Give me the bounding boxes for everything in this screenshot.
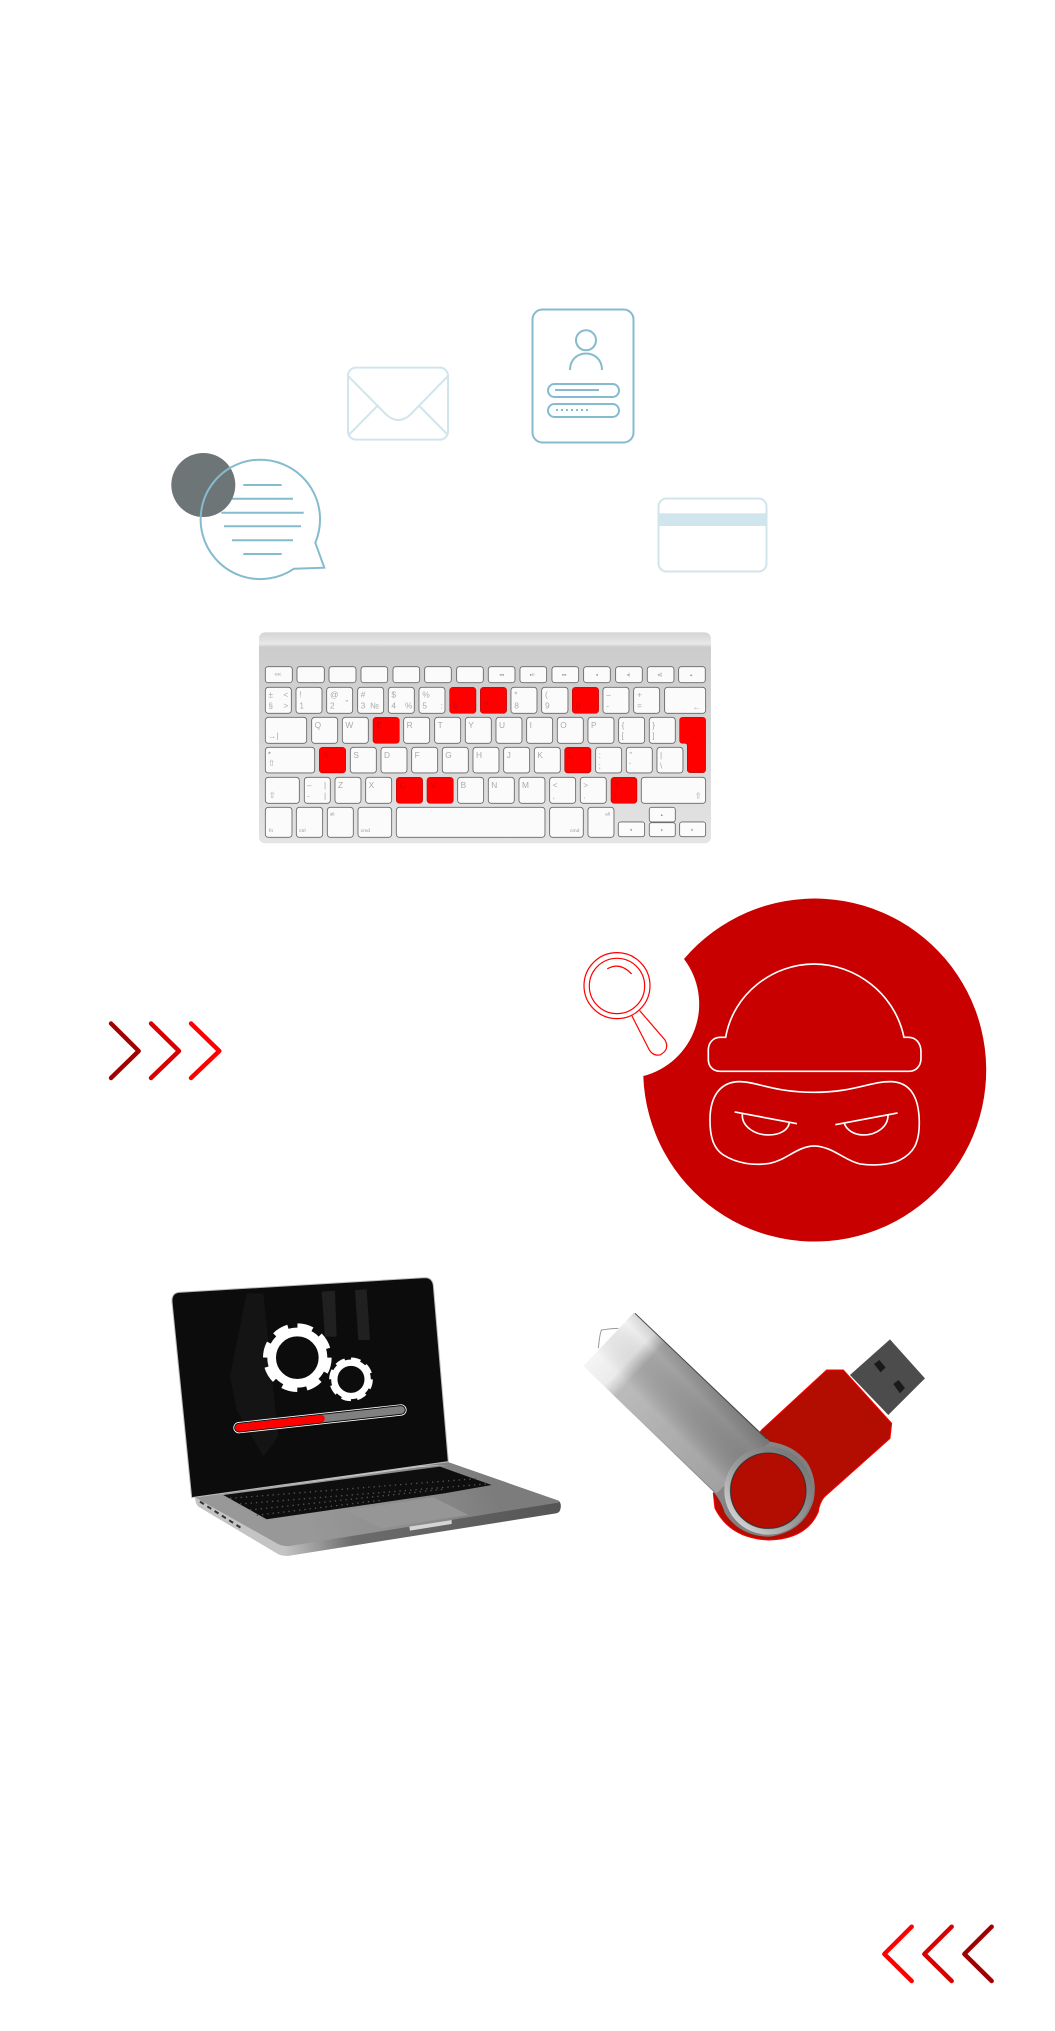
number key row: 4 — [391, 701, 396, 711]
QWERTY key row: →| — [268, 730, 278, 740]
number key row: : — [441, 701, 443, 711]
QWERTY key row: I — [530, 720, 532, 730]
modifier key row: ◂ — [630, 827, 632, 832]
bottom letter key row: < — [553, 780, 558, 790]
home key row: L — [568, 750, 573, 760]
number key row: @ — [330, 689, 338, 699]
home key row: H — [476, 750, 482, 760]
QWERTY key row: U — [499, 720, 505, 730]
number key row: § — [268, 701, 273, 711]
home key row: K — [537, 750, 543, 760]
bottom letter key row: > — [583, 780, 588, 790]
icon: gears — [266, 1327, 371, 1399]
QWERTY key row: E — [376, 720, 382, 730]
QWERTY key row: P — [591, 720, 597, 730]
number key row: 3 — [361, 701, 366, 711]
function key row — [265, 667, 705, 683]
bottom letter key row: , — [553, 791, 555, 801]
bottom letter key row: X — [369, 780, 375, 790]
bottom letter key row: ? — [614, 780, 619, 790]
QWERTY key row: ← — [691, 729, 700, 739]
QWERTY key row: Q — [315, 720, 322, 730]
bottom letter key row: Z — [338, 780, 343, 790]
bottom letter key row: C — [400, 780, 406, 790]
function key row: ◂) — [627, 672, 631, 677]
function key row: ◂)) — [657, 672, 663, 677]
bottom letter key row: ⇧ — [269, 790, 276, 800]
icon: magnifying glass — [584, 953, 667, 1055]
icon: chat bubble with grey dot — [171, 453, 324, 579]
icon: thief hat and mask — [708, 964, 921, 1165]
icon: credit card — [658, 498, 767, 572]
bottom letter key row: . — [583, 791, 586, 801]
number key row: > — [283, 701, 288, 711]
number key row: # — [361, 689, 366, 699]
number key row: ± — [268, 689, 273, 699]
home key row: G — [445, 750, 452, 760]
number key row: ( — [545, 689, 548, 699]
function key row: ◂ — [596, 672, 598, 677]
home key row: J — [507, 750, 511, 760]
bottom letter key row — [265, 777, 706, 803]
function key row: esc — [275, 671, 282, 676]
function key row: ▸II — [530, 672, 535, 677]
function key row: ◂◂ — [499, 672, 504, 677]
progress bar — [239, 1410, 401, 1428]
number key row: % — [405, 701, 413, 711]
QWERTY key row: { — [622, 720, 625, 730]
function key row: ▴ — [690, 672, 692, 677]
home key row: ; — [599, 761, 601, 771]
number key row: * — [514, 689, 518, 699]
number key row: $ — [391, 689, 396, 699]
bottom letter key row: N — [491, 780, 497, 790]
home key row: A — [323, 750, 329, 760]
bottom letter key row: | — [324, 791, 326, 801]
number key row: 7 — [484, 701, 489, 711]
home key row — [265, 747, 683, 773]
modifier key row — [265, 807, 706, 837]
modifier key row: ▴ — [661, 812, 663, 817]
red body — [713, 1370, 892, 1540]
number key row: % — [422, 689, 430, 699]
number key row: ! — [299, 689, 302, 699]
function key row: ▸▸ — [562, 672, 567, 677]
bottom letter key row: B — [461, 780, 467, 790]
USB flash drive — [583, 1313, 925, 1540]
number key row — [265, 687, 706, 713]
modifier key row: cmd — [570, 828, 580, 834]
modifier key row: ctrl — [299, 828, 306, 834]
bottom letter key row: - — [307, 791, 310, 801]
bottom letter key row: V — [430, 780, 436, 790]
home key row: | — [660, 750, 662, 760]
bottom letter key row: / — [614, 791, 617, 801]
bottom letter key row: ⇧ — [695, 791, 702, 801]
QWERTY key row: } — [652, 720, 655, 730]
home key row: D — [384, 750, 390, 760]
number key row: № — [370, 701, 379, 711]
modifier key row: fn — [269, 828, 273, 834]
icon: login card — [532, 310, 634, 442]
laptop screen — [172, 1278, 448, 1498]
modifier key row: ▸ — [691, 827, 693, 832]
home key row: ' — [629, 761, 631, 771]
metal swivel — [583, 1313, 815, 1537]
home key row: ⇧ — [268, 758, 275, 768]
number key row: 8 — [514, 701, 519, 711]
number key row: ← — [693, 701, 701, 711]
number key row: 2 — [330, 701, 335, 711]
laptop with settings screen — [172, 1278, 561, 1556]
bottom letter key row: M — [522, 780, 529, 790]
QWERTY key row: R — [407, 720, 413, 730]
number key row: – — [606, 689, 611, 699]
number key row: + — [637, 689, 642, 699]
number key row: 9 — [545, 701, 550, 711]
icon: envelope — [348, 368, 448, 440]
modifier key row: cmd — [361, 828, 370, 834]
number key row: " — [345, 698, 348, 708]
number key row: < — [283, 689, 288, 699]
QWERTY key row: [ — [622, 731, 625, 741]
number key row: = — [637, 701, 642, 711]
QWERTY key row — [265, 717, 706, 773]
laptop base — [195, 1462, 561, 1556]
modifier key row: alt — [330, 811, 335, 816]
modifier key row: ▾ — [661, 827, 663, 832]
home key row: F — [415, 750, 420, 760]
QWERTY key row: ] — [652, 731, 655, 741]
QWERTY key row: T — [438, 720, 443, 730]
bottom letter key row: – — [307, 780, 312, 790]
QWERTY key row: W — [345, 720, 353, 730]
home key row: • — [268, 747, 271, 757]
number key row: - — [606, 701, 609, 711]
number key row: 1 — [299, 701, 304, 711]
chevrons pointing right — [111, 1024, 219, 1078]
number key row: 6 — [453, 701, 458, 711]
QWERTY key row: Y — [468, 720, 474, 730]
home key row: \ — [660, 761, 663, 771]
home key row: S — [353, 750, 359, 760]
number key row: 5 — [422, 701, 427, 711]
USB plug — [850, 1339, 925, 1415]
number key row: 0 — [576, 701, 581, 711]
home key row: : — [599, 750, 601, 760]
red circle with thief icon — [643, 899, 986, 1242]
home key row: " — [629, 750, 632, 760]
bottom letter key row: | — [324, 780, 326, 790]
modifier key row: alt — [605, 811, 611, 816]
QWERTY key row: O — [560, 720, 567, 730]
keyboard with red keys — [259, 632, 711, 843]
chevrons pointing left — [884, 1927, 992, 1981]
